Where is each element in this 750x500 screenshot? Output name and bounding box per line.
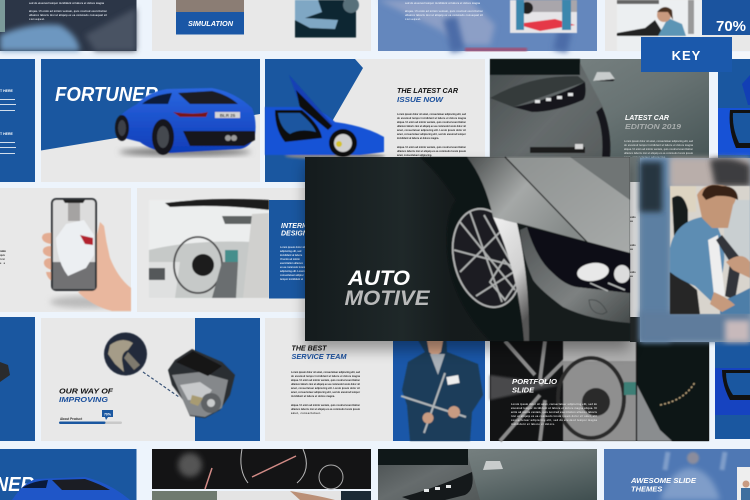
body text lines: sed do eiusmod tempor incididunt ut labore et dolore magna <box>29 2 105 5</box>
panel: portfolio slide: SLIDE <box>512 386 535 394</box>
panel: phone slide: minim <box>0 250 6 253</box>
illustration: grey car front and wheel <box>420 157 630 341</box>
panel: simulation slide <box>152 0 371 51</box>
icon: round engine photo <box>104 332 147 376</box>
panel: latest car issue slide <box>265 59 485 182</box>
hero panel: automotive <box>305 157 630 341</box>
heading: OUR WAY OF <box>59 386 113 396</box>
panel: interior design slide: ex ea commodo lorem <box>280 266 305 269</box>
panel: speedometer photo <box>152 449 371 500</box>
panel: interior design slide: consectetuer adipisc <box>280 274 304 277</box>
panel: engine slide <box>0 317 35 441</box>
panel: portfolio slide: Lorem ipsum dolor sit amet, consectetuer adipiscing elit, sed do <box>511 403 598 406</box>
body text lines: amet, consectetuer. <box>291 412 321 415</box>
panel: our way of improving <box>41 318 260 441</box>
panel: interior design slide <box>137 188 314 312</box>
inset photo: car in showroom <box>510 0 577 33</box>
sliver between hero and right photo: ea <box>630 220 633 223</box>
body text lines: do eiusmod tempor incididunt ut labore et dolore magna <box>291 375 361 378</box>
body text lines: amet, consectetuer adipiscing elit, sed do eiusmod tempor <box>397 133 466 136</box>
hood <box>505 157 630 253</box>
panel: phone slide: nisi <box>0 258 5 261</box>
body text lines <box>397 113 467 157</box>
text fragments: T HERE <box>0 89 14 93</box>
photo: driver hand on gear <box>295 0 359 38</box>
panel: interior design slide: tempor incididunt ut <box>280 278 303 281</box>
text fragments: T HERE <box>0 132 14 136</box>
panel: dark car slide: EDITION 2019 <box>625 122 682 131</box>
panel: awesome slide themes <box>604 449 750 500</box>
KEY badge: KEY <box>672 48 701 63</box>
sliver between hero and right photo: estio <box>630 244 636 247</box>
panel: portfolio slide: enim ad minim veniam, quis nostrud exercitation ullamco laboris <box>511 411 598 414</box>
body text lines: amet, consectetuer adipiscing. <box>397 154 432 157</box>
panel: interior design slide: adipiscing elit, sed <box>280 250 302 253</box>
title: MOTIVE <box>344 287 431 310</box>
body text lines <box>29 2 108 21</box>
wheel rim <box>443 202 531 314</box>
panel: our way of improving: IMPROVING <box>59 395 108 404</box>
dashed connector <box>143 372 179 397</box>
illustration: mechanic <box>401 330 483 441</box>
panel: interior design slide: Lorem ipsum dolor sit <box>280 246 305 249</box>
body text lines <box>291 371 361 415</box>
sensor <box>589 300 607 314</box>
body text lines: incididunt ut labore et dolore magna. <box>397 137 439 140</box>
simulation label: SIMULATION <box>188 21 234 28</box>
panel: fortuner repeat bottom <box>0 449 136 500</box>
body text lines: amet, consectetuer adipiscing elit. Lorem ipsum dolor sit <box>291 387 360 390</box>
body text lines: ullamco laboris nisi ut aliquip ex ea commodo lorem dolor sit <box>291 383 360 386</box>
illustration: blue sports car rear <box>115 88 256 156</box>
panel: interior design slide: DESIGN <box>281 230 309 238</box>
panel: blurred blue showroom: ullamco laboris nisi ut aliquip ex ea commodo consequat sit <box>405 14 483 17</box>
illustration: hand holding phone <box>42 198 131 311</box>
caption lines: Lorem ipsum dolor sit amet, consectetuer adipiscing elit, sed <box>624 140 694 143</box>
heading: INTERIOR <box>281 223 314 230</box>
panel: left blue fragment <box>0 59 35 182</box>
panel: interior design slide: exercitation ullamco <box>280 262 304 265</box>
body text lines: amet, consectetuer adipiscing elit, sed do eiusmod tempor <box>291 391 360 394</box>
progress bar <box>59 410 122 424</box>
white strip <box>732 52 750 60</box>
illustration: engine <box>168 349 235 418</box>
sliver between hero and right photo: ea <box>630 248 633 251</box>
panel: right blue fragment <box>718 59 750 182</box>
sliver between hero and right photo <box>630 157 640 342</box>
panel: awesome slide themes: THEMES <box>631 484 662 494</box>
caption lines: amet, consectetuer adipiscing. <box>624 156 666 159</box>
body text lines: incididunt ut labore et dolore magna. <box>291 395 335 398</box>
panel: phone slide: ea <box>0 262 6 265</box>
illustration: blue sports car rear: BLR 25 <box>220 113 236 118</box>
panel: blurred blue showroom: sed do eiusmod tempor incididunt ut labore et dolore magna <box>405 2 481 5</box>
panel: fortuner slide <box>41 59 260 182</box>
body text lines: Lorem ipsum dolor sit amet, consectetuer adipiscing elit, sed <box>397 113 467 116</box>
caption lines <box>624 140 694 159</box>
sliver between hero and right photo: estio <box>630 216 636 219</box>
panel: portfolio slide: consectetuer adipiscing elit, sed do eiusmod tempor magna <box>511 419 598 422</box>
panel: blurred top-left photo <box>0 0 136 51</box>
white strip <box>493 217 532 341</box>
body text lines: amet, consectetuer adipiscing elit. Lorem ipsum dolor sit <box>397 129 466 132</box>
body text lines: Lorem ipsum dolor sit amet, consectetuer adipiscing elit, sed <box>291 371 361 374</box>
arch and tyre <box>420 157 530 341</box>
panel: blurred blue showroom: consequat. <box>405 18 421 21</box>
panel: phone slide: quis <box>0 254 6 257</box>
panel: right blue fragment lower <box>715 318 750 439</box>
panel: blurred man photo <box>640 158 750 342</box>
panel: dark car slide <box>490 59 709 182</box>
caption lines: aliqua. Ut enim ad minim veniam, quis nostrud exercitation <box>624 148 694 151</box>
inset photo <box>737 467 750 500</box>
body text lines: aliqua. Ut enim ad minim veniam, quis nostrud exercitation <box>291 379 361 382</box>
inset photo: man fastening seat belt <box>670 185 750 314</box>
heading: AWESOME SLIDE <box>630 476 697 485</box>
panel: phone slide <box>0 188 131 312</box>
panel: portfolio slide: eiusmod tempor incididunt ut labore et dolore magna aliqua. Ut <box>511 407 597 410</box>
heading: THE LATEST CAR <box>397 86 459 95</box>
body text lines: aliqua. Ut enim ad minim veniam, quis nostrud exercitation <box>29 10 108 13</box>
body text lines: do eiusmod tempor incididunt ut labore et dolore magna <box>397 117 467 120</box>
grey band <box>520 227 630 323</box>
body text lines: ullamco laboris nisi ut aliquip ex ea commodo consequat sit <box>29 14 107 17</box>
panel: interior design slide: Ut enim ad minim <box>280 258 300 261</box>
body text lines: consequat. <box>29 18 45 21</box>
heading: LATEST CAR <box>625 113 670 122</box>
illustration: blue car with open door <box>265 75 385 159</box>
panel: latest car issue slide: ISSUE NOW <box>397 95 444 104</box>
panel: interior design slide: incididunt ut labore <box>280 254 303 257</box>
panel: service team slide: SERVICE TEAM <box>292 352 347 361</box>
caption lines: ullamco laboris nisi ut aliquip ex ea commodo lorem ipsum <box>624 152 693 155</box>
title: AUTO <box>347 267 410 290</box>
panel: service team slide <box>265 318 485 441</box>
silver fender <box>467 157 588 243</box>
caption lines: do eiusmod tempor incididunt ut labore et dolore magna <box>624 144 694 147</box>
panel: blurred blue showroom <box>378 0 597 51</box>
heading: PORTFOLIO <box>512 377 557 386</box>
panel: interior design slide: adipiscing elit. Lorem <box>280 270 305 273</box>
sliver between hero and right photo: estio <box>630 271 636 274</box>
body text lines: ullamco laboris nisi ut aliquip ex ea commodo lorem dolor sit <box>397 125 466 128</box>
body text lines: aliqua. Ut enim ad minim veniam, quis nostrud exercitation <box>397 146 467 149</box>
body text lines: aliqua. Ut enim ad minim veniam, quis nostrud exercitation <box>397 121 467 124</box>
headlight <box>527 227 630 293</box>
body text lines: aliqua. Ut enim ad minim veniam, quis nostrud exercitation <box>291 404 361 407</box>
heading: THE BEST <box>292 344 328 352</box>
progress bar: 70% <box>104 412 112 416</box>
text fragments <box>0 89 16 154</box>
panel: blurred blue showroom: aliqua. Ut enim ad minim veniam, quis nostrud exercitation <box>405 10 484 13</box>
panel: dark car repeat bottom <box>378 449 597 500</box>
lower bumper <box>517 223 630 341</box>
title: fortuner: FORTUNER <box>55 84 159 106</box>
panel: portfolio slide: nisi ut aliquip ex ea commodo lorem ipsum dolor sit amet, elit <box>511 415 597 418</box>
KEY badge <box>641 37 732 72</box>
panel: top-right photo with woman <box>605 0 750 51</box>
title <box>344 267 431 310</box>
sliver between hero and right photo: ea <box>630 275 633 278</box>
progress bar: About Product <box>60 417 83 421</box>
body text lines: ullamco laboris nisi ut aliquip ex ea commodo lorem ipsum <box>397 150 466 153</box>
hero shadow <box>305 165 630 350</box>
body text lines: ullamco laboris nisi ut aliquip ex ea commodo lorem ipsum <box>291 408 360 411</box>
value: 70%: 70% <box>716 18 746 35</box>
panel: portfolio slide: incididunt ut labore et dolore. <box>511 423 555 426</box>
panel: portfolio slide <box>490 318 709 441</box>
callout: 70 percent <box>102 410 113 420</box>
